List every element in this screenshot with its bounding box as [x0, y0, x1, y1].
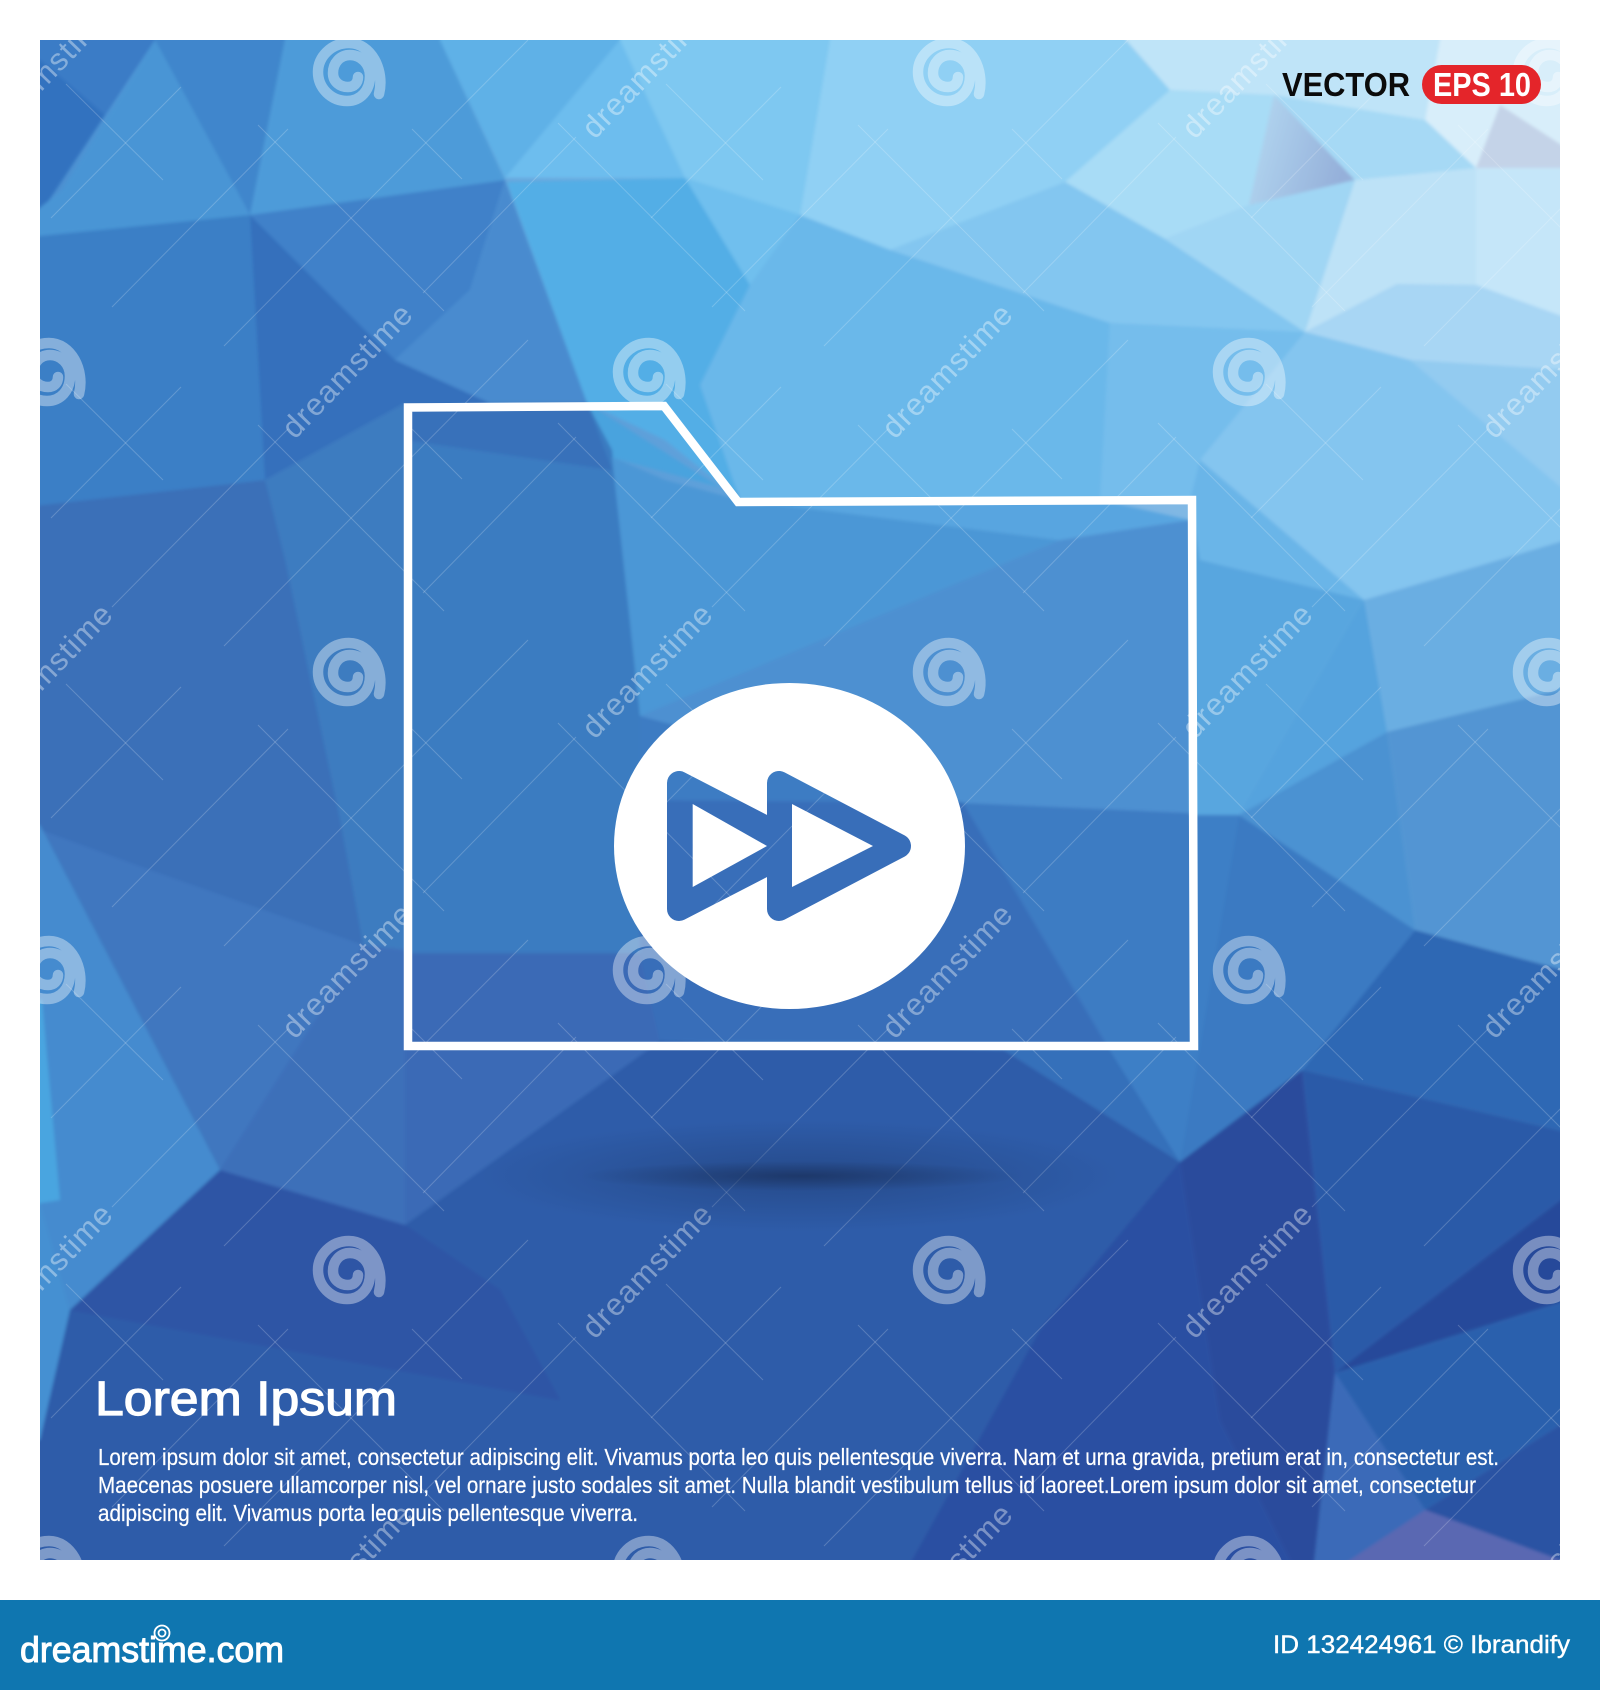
icon: fast-forward button [614, 683, 965, 1009]
panel: low-poly blue background: dreamstime [275, 897, 419, 1045]
panel: low-poly blue background: dreamstime [875, 897, 1019, 1045]
panel: low-poly blue background: dreamstime [875, 297, 1019, 445]
panel: low-poly blue background: dreamstime [575, 597, 719, 745]
footer image id and credit: ID 132424961 © Ibrandify [1273, 1631, 1571, 1659]
badge label: EPS 10: EPS 10 [1433, 66, 1531, 103]
badge label: vector: VECTOR [1282, 66, 1410, 103]
heading: Lorem Ipsum [95, 1373, 397, 1426]
panel: low-poly blue background: dreamstime [875, 1497, 1019, 1645]
panel: low-poly blue background: dreamstime [575, 0, 719, 145]
panel: low-poly blue background: dreamstime [275, 1497, 419, 1645]
panel: low-poly blue background: dreamstime [1175, 597, 1319, 745]
panel: low-poly blue background: dreamstime [1175, 1197, 1319, 1345]
body text: Maecenas posuere ullamcorper nisl, vel ornare justo sodales sit amet. Nulla blandit vestibulum tellus id laoreet.Lorem ipsum dolor sit amet, consectetur [98, 1472, 1476, 1498]
panel: low-poly blue background: dreamstime [1175, 0, 1319, 145]
body text: adipiscing elit. Vivamus porta leo quis pellentesque viverra. [98, 1500, 638, 1526]
body text [98, 1444, 1499, 1526]
badge: vector EPS 10 [1282, 65, 1541, 104]
footer logo spiral [154, 1626, 170, 1640]
footer bar [0, 1600, 1600, 1690]
badge pill [1422, 65, 1541, 104]
panel: low-poly blue background: dreamstime [275, 297, 419, 445]
icon: folder outline [408, 406, 1194, 1046]
icon shadow [480, 1120, 1120, 1232]
footer logo text: dreamstime.com [20, 1629, 284, 1670]
panel: low-poly blue background: dreamstime [575, 1197, 719, 1345]
